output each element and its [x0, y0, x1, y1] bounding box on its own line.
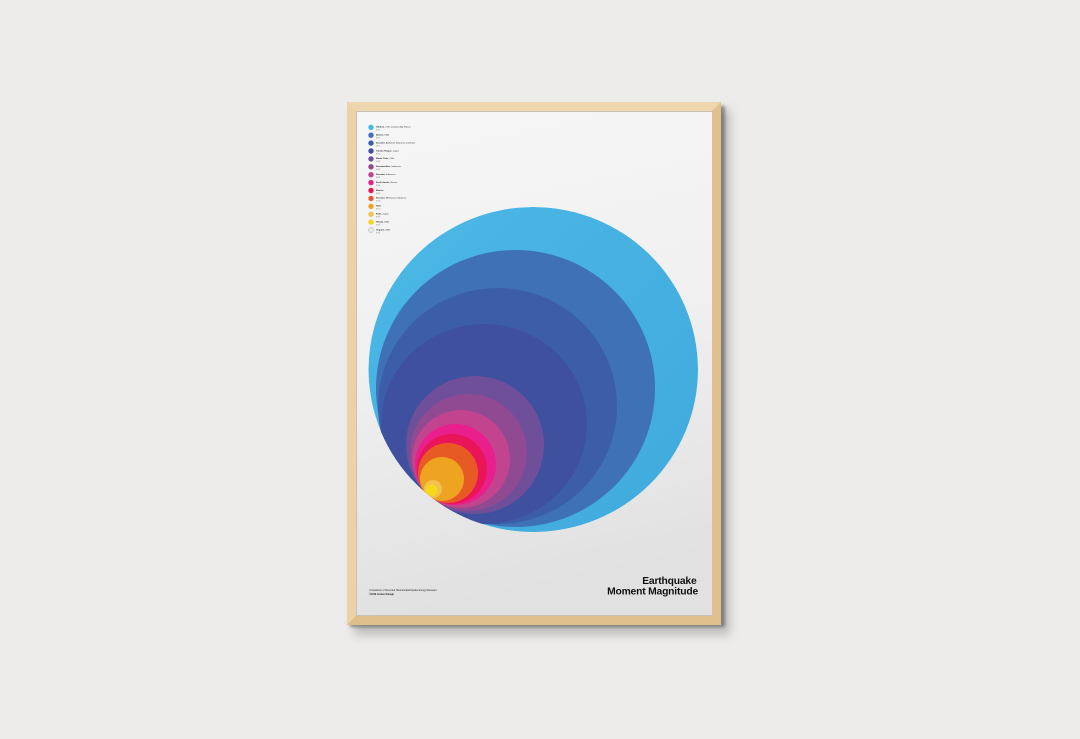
legend item: Alaska	[368, 132, 389, 140]
legend item: Kobe: M 6.9	[376, 216, 380, 218]
circle: Tohoku	[381, 324, 587, 524]
circle: Kuril Islands	[415, 424, 496, 505]
poster paper	[356, 111, 712, 616]
legend item: Sumatra Andaman	[368, 140, 416, 147]
legend item: Alaska: M 9.2	[376, 138, 380, 140]
frame shadow	[350, 106, 730, 635]
circle: Sumatra Mentawai	[418, 443, 478, 503]
circle: Hawaii	[426, 484, 438, 496]
legend item: Hawaii	[368, 219, 389, 226]
nested magnitude circles	[368, 207, 698, 532]
title: Moment Magnitude	[607, 586, 698, 598]
circle: Sumatra Nias	[410, 394, 527, 511]
circle: Haiti	[420, 457, 464, 501]
legend item: Mexico: Mexico	[376, 190, 384, 192]
legend item: Sumatra Mentawai	[368, 196, 407, 203]
footnote: Comparison of Recorded Historical Earthquake Energy Released	[369, 589, 437, 592]
legend item: Virginia: M 5.8	[376, 232, 380, 234]
legend item: Valdivia	[368, 125, 411, 132]
legend item: Haiti: Haiti	[376, 205, 381, 208]
legend item: Maule: Maule Chile, Chile	[376, 158, 395, 160]
legend item: Sumatra Mentawai: M 7.8	[376, 201, 380, 203]
legend item: Hawaii: M 6.9	[376, 224, 380, 226]
footnote: ©2019 Context Design	[369, 593, 394, 596]
legend item: Tohoku	[368, 148, 400, 155]
legend item: Sumatra Nias: Sumatra-Nias, Indonesia	[376, 165, 402, 168]
legend item: Virginia: Virginia, USA	[376, 228, 390, 231]
legend item: Sumatra Andaman: Sumatra, Andaman Indonesia and India	[376, 141, 416, 144]
circle: Valdivia	[368, 207, 698, 532]
footnote	[369, 589, 437, 596]
framed poster	[347, 102, 734, 640]
legend item: Hawaii: Hawaii, USA	[376, 220, 389, 223]
legend item: Haiti	[368, 204, 381, 211]
legend item: Kuril Islands: M 8.3	[376, 185, 380, 187]
legend item: Kobe	[368, 212, 389, 218]
title: Earthquake	[642, 576, 697, 587]
legend	[368, 125, 416, 234]
circle: Sumatra	[412, 410, 510, 508]
legend item: Kuril Islands	[368, 180, 398, 187]
legend item: Virginia	[368, 228, 390, 234]
legend item: Sumatra Nias: M 8.6	[376, 169, 380, 171]
legend item: Sumatra	[368, 172, 396, 179]
legend item: Kobe: Kobe, Japan	[376, 214, 389, 216]
circle: Sumatra Andaman	[378, 288, 617, 524]
legend item: Haiti: M 7.0	[376, 209, 380, 211]
legend item: Tohoku: Tohoku Region, Japan	[376, 150, 400, 152]
legend item: Mexico: M 8.0	[376, 193, 380, 195]
legend item: Mexico	[368, 188, 384, 195]
circle: Alaska	[376, 250, 655, 527]
circle: Mexico	[417, 434, 487, 504]
legend item: Maule: M 8.8	[376, 161, 380, 163]
legend item: Kuril Islands: Kuril Islands, Russia	[376, 182, 398, 184]
legend item: Maule	[368, 156, 395, 163]
legend item: Sumatra Mentawai: Sumatra, Mentawai, Indonesia	[376, 197, 407, 200]
circle: Kobe	[424, 480, 442, 498]
wooden frame	[347, 102, 721, 625]
title	[607, 576, 698, 598]
legend item: Valdivia: Valdivia, Chile and possibly Hawaii	[376, 127, 411, 129]
legend item: Tohoku: M 9.0	[376, 153, 380, 155]
legend item: Alaska: Alaska, USA	[376, 134, 389, 136]
legend item: Sumatra Andaman: M 9.1	[376, 145, 380, 147]
legend item: Sumatra: Sumatra, Indonesia	[376, 173, 396, 176]
legend item: Valdivia: M 9.5	[376, 130, 380, 132]
circle: Maule	[406, 376, 544, 514]
legend item: Sumatra Nias	[368, 164, 402, 171]
legend item: Sumatra: M 8.4	[376, 177, 380, 179]
